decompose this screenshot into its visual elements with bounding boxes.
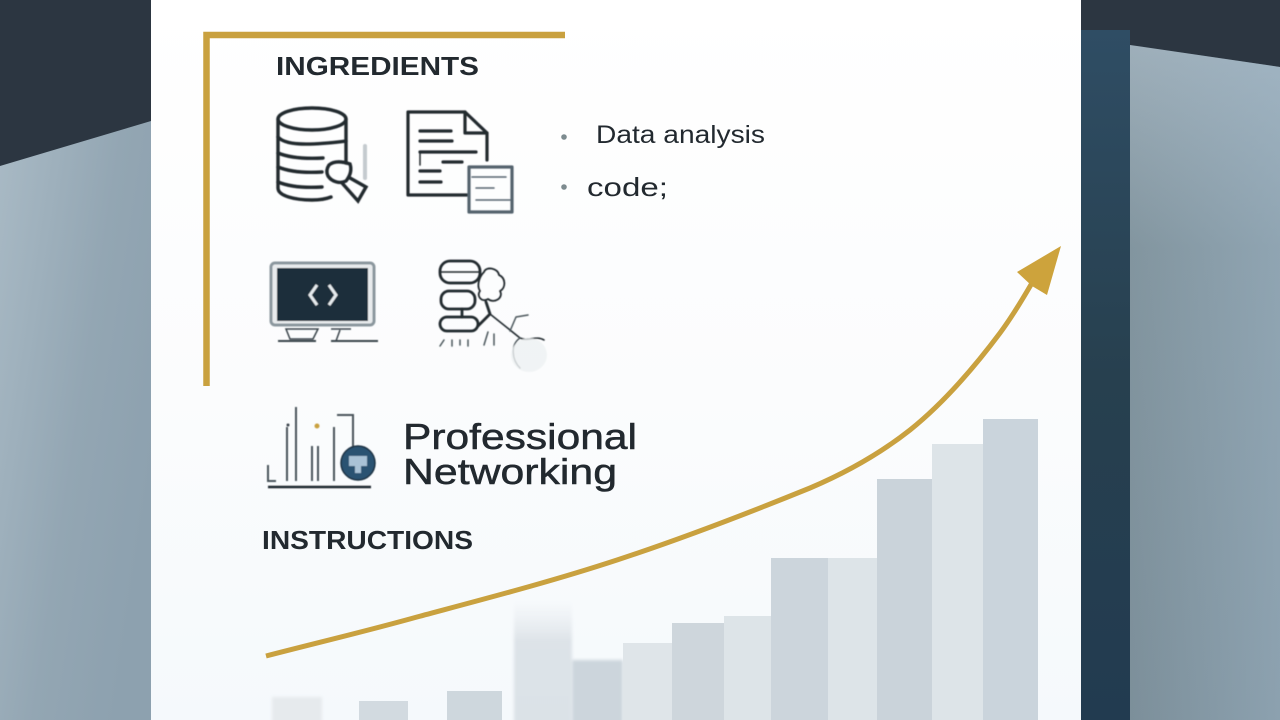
- bar chart: [272, 419, 1038, 720]
- bar 3: [447, 691, 502, 720]
- bar 6: [623, 643, 672, 720]
- heading: professional networking: [403, 416, 637, 492]
- gold corner frame: [206, 35, 565, 386]
- bullet: code: [561, 172, 668, 202]
- icon: monitor with code brackets: [271, 263, 378, 341]
- heading: instructions: INSTRUCTIONS: [262, 525, 473, 555]
- heading: ingredients: INGREDIENTS: [276, 51, 479, 81]
- icon: document with table: [408, 112, 512, 212]
- growth arrow: [266, 246, 1061, 656]
- icon: database with ribbon: [278, 108, 366, 201]
- bar 2: [359, 701, 408, 720]
- bar 11: [877, 479, 932, 720]
- icon: data stack with brain and hand: [440, 261, 547, 372]
- icon: bar chart with globe: [268, 407, 375, 487]
- white page panel: [151, 0, 1081, 720]
- bar 9: [771, 558, 828, 720]
- bar 12: [932, 444, 983, 720]
- bar 13: [983, 419, 1038, 720]
- bullet: code: code;: [587, 172, 668, 202]
- bar 8: [724, 616, 771, 720]
- bullet list: [561, 121, 765, 202]
- bullet: data analysis: Data analysis: [596, 121, 765, 149]
- bar 5: [572, 660, 623, 720]
- heading: professional networking: Networking: [403, 451, 617, 492]
- bar 10: [828, 558, 877, 720]
- heading: professional networking: Professional: [403, 416, 637, 457]
- bar 1: [272, 697, 322, 720]
- bar 7: [672, 623, 724, 720]
- bar 4: [514, 600, 572, 720]
